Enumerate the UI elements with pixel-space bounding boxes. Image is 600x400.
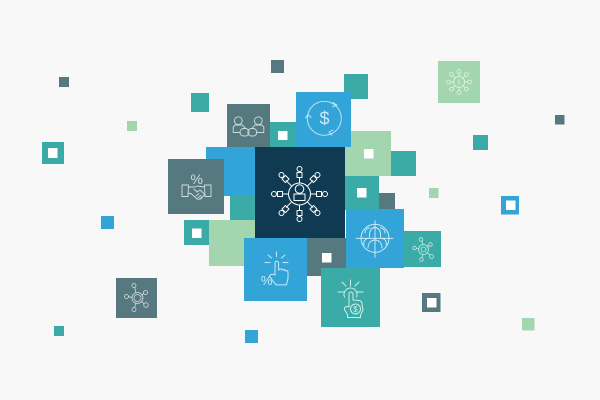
small square: green bottom right (522, 318, 534, 330)
panel: central dark tile (255, 147, 345, 238)
panel: teal square under blue (230, 196, 256, 221)
icon: target with people (356, 221, 393, 257)
panel: money touch tile (321, 268, 380, 327)
panel: people tile (227, 104, 270, 147)
panel: green network tile (438, 61, 480, 103)
icon: dollar sign: $ (319, 108, 330, 128)
icon: radial network (447, 70, 471, 94)
panel: slate network tile (116, 278, 157, 318)
small square: teal upper (191, 93, 209, 112)
outlined square: slate right (422, 293, 440, 312)
icon: dollar sign: $ (353, 305, 358, 314)
panel: teal square right of centre (345, 176, 379, 210)
icon: person hub network (272, 166, 328, 222)
panel: target tile (346, 209, 404, 268)
panel: teal square behind people tile (270, 122, 300, 150)
small square: green right (429, 188, 438, 198)
panel: teal square far right (391, 151, 416, 176)
small square: blue left (101, 216, 114, 229)
panel: slate square below centre (307, 238, 346, 276)
icon: two people with linked hands (233, 117, 264, 136)
small square: teal bottom left (54, 326, 64, 336)
icon: network with centre node (413, 238, 434, 261)
icon: tapping hand (265, 252, 288, 285)
small square: green left (127, 121, 137, 131)
icon: handshake (182, 185, 211, 199)
small square: slate top (271, 60, 284, 73)
icon: percent sign: % (190, 171, 203, 187)
small square: slate right top (555, 115, 564, 124)
panel: handshake tile (168, 159, 224, 214)
outlined square: blue right (501, 196, 519, 214)
panel: green square lower left (209, 220, 255, 266)
panel: teal square with white dot (184, 220, 209, 245)
panel: dollar cycle tile (296, 92, 351, 147)
small square: teal top (344, 74, 368, 99)
icon: hand tapping with dollar (338, 280, 363, 318)
panel: hand with percent tile (244, 238, 307, 301)
panel: slate small square right (379, 193, 395, 210)
small square: blue bottom (245, 330, 258, 343)
icon: hub network (124, 284, 148, 312)
panel: blue square left of centre (206, 147, 256, 196)
panel: green square upper right (345, 131, 391, 176)
icon: circular arrows (306, 101, 341, 135)
icon: percent sign: % (261, 273, 273, 288)
panel: network tile teal (404, 231, 441, 267)
small square: teal right (473, 135, 488, 150)
outlined square: teal left (42, 142, 64, 164)
small square: slate top left (59, 77, 69, 87)
